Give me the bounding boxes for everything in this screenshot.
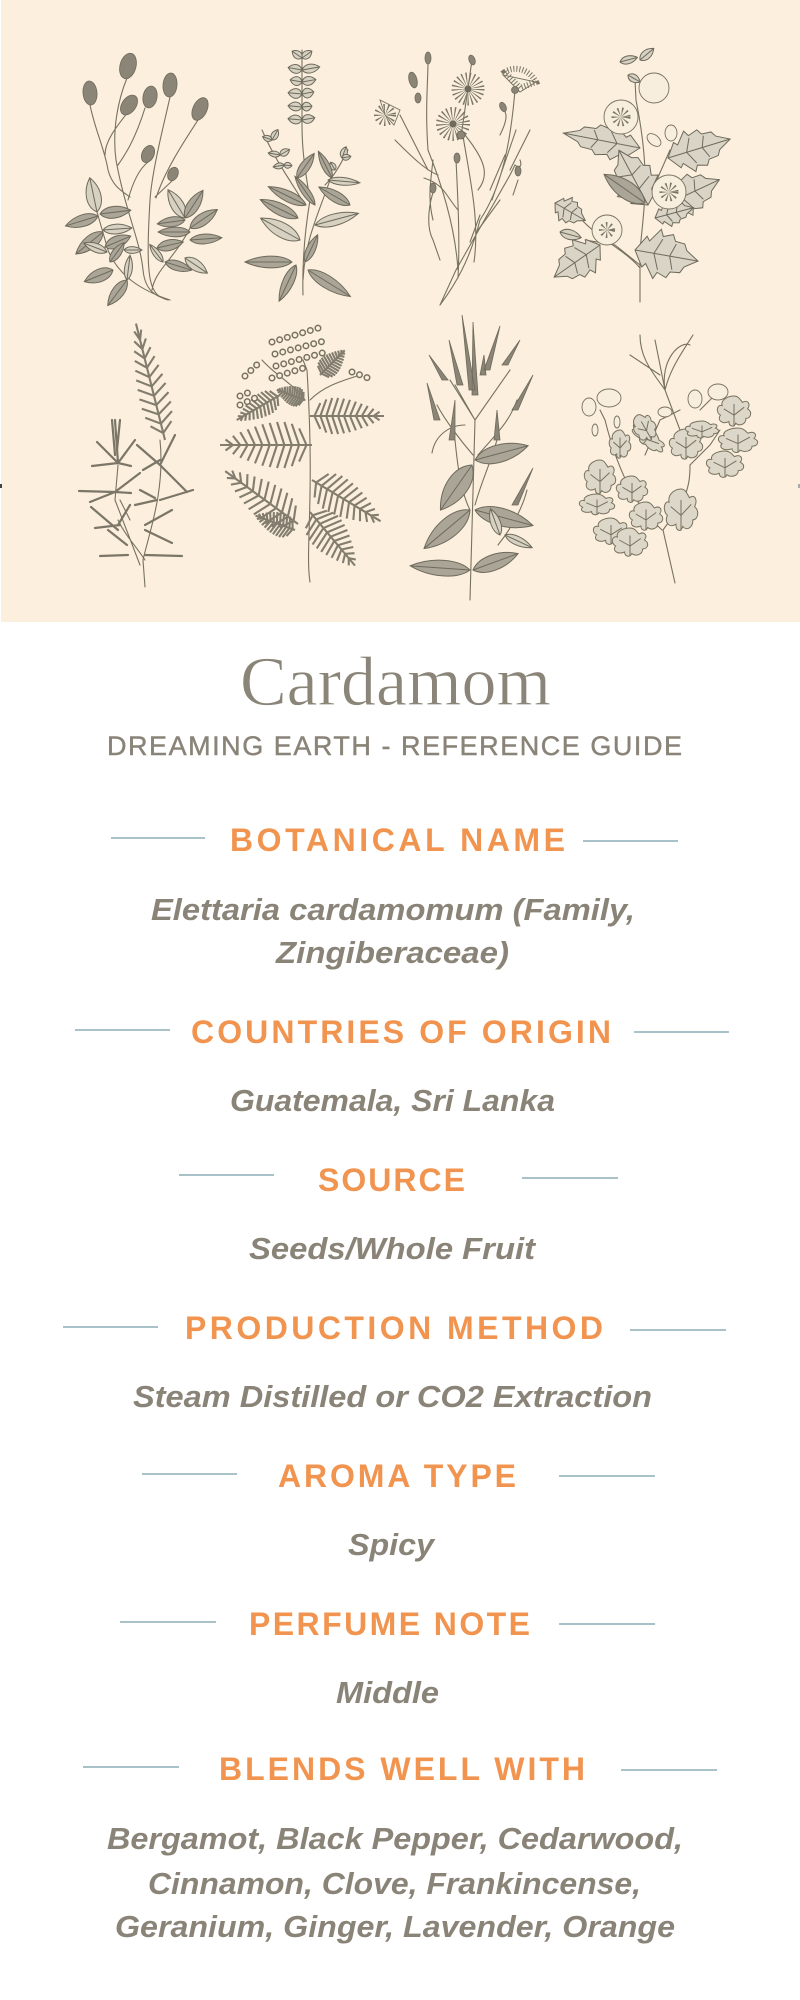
plant: celandine with lobed leaves and seed pods (579, 335, 758, 583)
plant: burnet with oval seed heads (64, 51, 222, 309)
title: Cardamom (240, 644, 551, 721)
section: aroma type: AROMA TYPE (278, 1458, 516, 1494)
section: perfume note: PERFUME NOTE (249, 1606, 530, 1642)
plant: sage with flower spike (245, 48, 360, 304)
section: production method: Steam Distilled or CO2 Extraction (133, 1379, 652, 1414)
edge marks (0, 484, 800, 488)
section: countries of origin (75, 1014, 729, 1118)
section: perfume note: Middle (336, 1675, 439, 1710)
section: source: SOURCE (318, 1162, 465, 1198)
plant: mallow with rounded flowers and broad leaves (543, 45, 736, 302)
section: perfume note (120, 1606, 655, 1710)
section: botanical name: Zingiberaceae) (275, 935, 509, 970)
section: botanical name (111, 822, 678, 970)
section: production method (63, 1310, 726, 1414)
panel: botanical illustration banner (0, 0, 800, 622)
section: source: Seeds/Whole Fruit (249, 1231, 537, 1266)
section: aroma type (142, 1458, 655, 1562)
section: blends well with: Geranium, Ginger, Lavender, Orange (115, 1909, 675, 1944)
plant: verbena with pointed spikes (410, 315, 535, 600)
section: botanical name: BOTANICAL NAME (230, 822, 565, 858)
section: blends well with (83, 1751, 717, 1944)
section: botanical name: Elettaria cardamomum (Family, (151, 892, 635, 927)
plant: cornflower with thin stems (379, 52, 536, 305)
section: source (179, 1162, 618, 1266)
subtitle: DREAMING EARTH - REFERENCE GUIDE (107, 731, 682, 761)
section: blends well with: BLENDS WELL WITH (219, 1751, 585, 1787)
section: blends well with: Cinnamon, Clove, Frankincense, (148, 1866, 641, 1901)
section: blends well with: Bergamot, Black Pepper, Cedarwood, (107, 1821, 683, 1856)
section: countries of origin: COUNTRIES OF ORIGIN (191, 1014, 611, 1050)
plant: tansy with fern leaves and umbels (214, 326, 390, 582)
section: production method: PRODUCTION METHOD (185, 1310, 603, 1346)
section: countries of origin: Guatemala, Sri Lanka (230, 1083, 555, 1118)
section: aroma type: Spicy (348, 1527, 436, 1562)
plant: savory with needle leaves (79, 320, 193, 587)
